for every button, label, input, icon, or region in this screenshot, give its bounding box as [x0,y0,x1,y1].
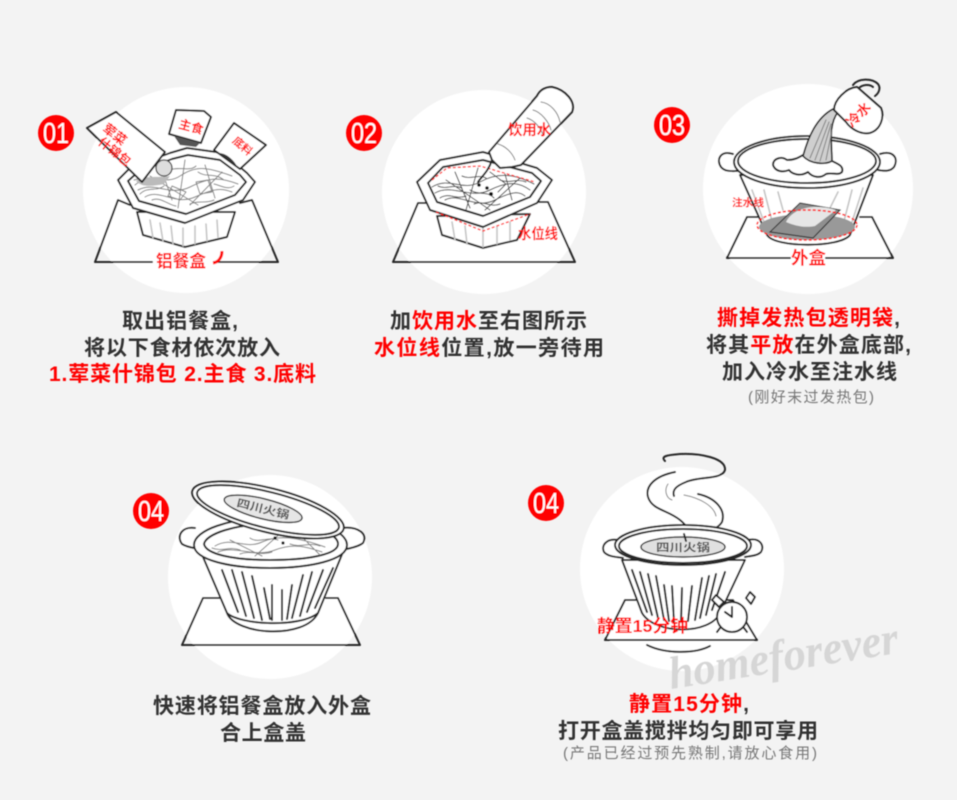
mat [605,600,757,640]
icon: alarm clock [712,592,755,632]
caption: step 1: 1.荤菜什锦包 2.主食 3.底料 [49,362,316,386]
illustration: tilted lid [187,470,349,550]
step badge 01: 01 [43,118,69,150]
panel: step 1 [38,87,289,293]
caption: step 3: 加入冷水至注水线 [722,361,897,384]
arc under mat [647,645,710,652]
step badge 04 repeated: 04 [533,488,559,520]
arrow: red curl [213,251,222,263]
step badge 02: 02 [351,118,377,150]
illustration: aluminium tray [118,148,255,247]
caption: step 2: 加饮用水至右图所示 [390,310,587,333]
label: outer box: 外盒 [791,248,826,268]
step badge 04: 04 [138,496,164,528]
label: rest 15 minutes: 静置15分钟 [597,616,688,636]
caption: step 2: 水位线位置,放一旁待用 [374,336,604,360]
white circle backdrop step 4 [168,475,372,679]
caption: step 4: 快速将铝餐盒放入外盒 [153,694,371,718]
caption: step 4: 合上盒盖 [220,721,306,745]
white circle backdrop step 3 [703,84,913,294]
packet: base seasoning [214,123,266,169]
white circle backdrop step 2 [382,90,586,294]
caption: step 2 [374,310,604,360]
illustration: pitcher and pouring stream: 冷水 [843,99,874,130]
caption: step 1: 将以下食材依次放入 [84,336,280,360]
mat [182,598,360,645]
label: drinking water: 饮用水 [508,122,551,139]
illustration: steam [647,454,725,541]
packet: staple food [169,110,211,147]
white circle backdrop step 1 [83,87,289,293]
caption: step 5: 静置15分钟, [629,693,749,716]
mat [727,217,893,258]
label: water line: 水位线 [518,225,558,243]
caption: step 3: (刚好末过发热包) [748,389,874,406]
white circle backdrop step 5 [580,467,784,671]
caption: step 5: 打开盒盖搅拌均匀即可享用 [558,719,818,743]
caption: step 3 [706,307,911,406]
packet: vegetable mix: 荤菜 [100,121,130,148]
panel: step 4 [133,470,372,679]
illustration: pot with closed lid [603,525,762,630]
label: fill line: 注水线 [732,196,765,209]
caption: step 4 [153,694,371,745]
illustration: tray with water line [417,152,552,248]
panel: step 2 [346,87,586,294]
label: aluminium tray: 铝餐盒 [156,251,206,271]
caption: step 3: 撕掉发热包透明袋, [717,307,900,330]
caption: step 5 [558,693,818,762]
illustration: pitcher and pouring stream [773,80,882,177]
illustration: pot [180,518,364,631]
panel: step 5 [528,454,903,699]
illustration: tilted lid: 四川火锅 [235,495,291,522]
caption: step 1: 取出铝餐盒, [122,309,238,333]
caption: step 3: 将其平放在外盒底部, [706,333,911,357]
illustration: water bottle [478,87,573,182]
mat [393,202,575,262]
packet: vegetable mix: 什锦包 [95,134,135,169]
watermark: homeforever [665,612,903,699]
illustration: outer bowl with water [719,136,896,245]
step badge 03: 03 [659,110,685,142]
caption: step 5: (产品已经过预先熟制,请放心食用) [563,745,817,762]
caption: step 1 [49,309,316,386]
packet: vegetable mix [87,112,165,182]
packet: staple food: 主食 [177,116,206,137]
mat [95,200,278,262]
panel: step 3 [654,80,913,294]
packet: base seasoning: 底料 [230,134,255,158]
illustration: pot with closed lid: 四川火锅 [656,540,710,554]
